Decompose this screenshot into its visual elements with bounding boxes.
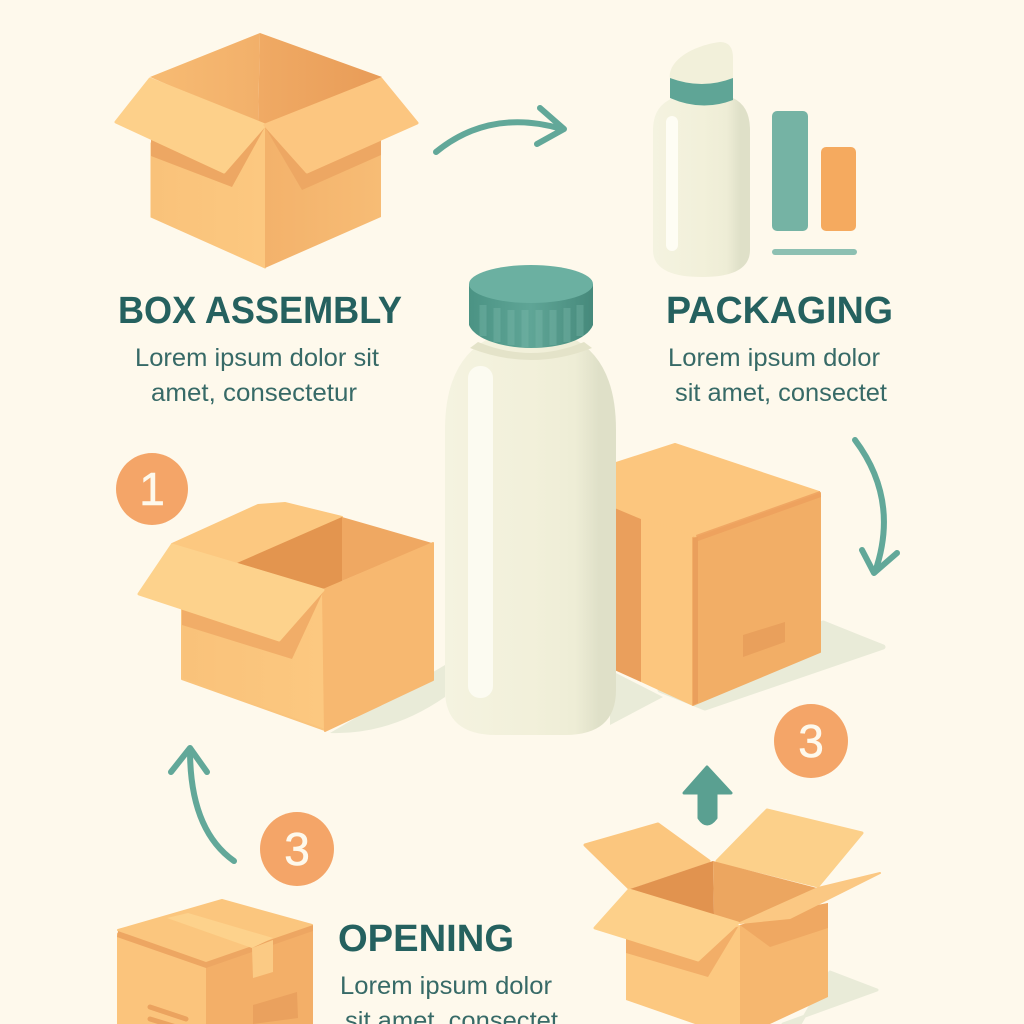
icon: taped box bottom left xyxy=(117,900,313,1024)
badge: number 3 left xyxy=(260,812,334,886)
text: packaging description: sit amet, consectet xyxy=(675,379,887,407)
badge: number 1 xyxy=(116,453,188,525)
arrow: right curved down xyxy=(855,440,897,573)
badge: number 1: 1 xyxy=(139,463,165,515)
icon: box assembly open box xyxy=(116,33,417,268)
chart: bars xyxy=(772,111,857,255)
badge: number 3 right: 3 xyxy=(798,715,824,767)
heading: box assembly: BOX ASSEMBLY xyxy=(118,290,402,332)
text: opening description xyxy=(340,972,558,1024)
text: packaging description xyxy=(668,344,887,407)
icon: small bottle xyxy=(653,42,750,277)
text: opening description: Lorem ipsum dolor xyxy=(340,972,552,1000)
text: packaging description: Lorem ipsum dolor xyxy=(668,344,880,372)
arrow: up block xyxy=(684,767,731,824)
heading: packaging: PACKAGING xyxy=(666,290,893,332)
text: box assembly description: amet, consectetur xyxy=(151,379,357,407)
icon: open box left xyxy=(139,503,445,733)
arrow: top xyxy=(436,108,564,152)
badge: number 3 left: 3 xyxy=(284,823,310,875)
text: box assembly description: Lorem ipsum dolor sit xyxy=(135,344,379,372)
text: box assembly description xyxy=(135,344,379,407)
heading: opening: OPENING xyxy=(338,918,514,960)
arrow: left curved up xyxy=(171,748,234,861)
icon: closed box right xyxy=(610,444,883,725)
badge: number 3 right xyxy=(774,704,848,778)
icon: central bottle xyxy=(445,265,616,735)
icon: open box bottom right xyxy=(585,810,880,1024)
